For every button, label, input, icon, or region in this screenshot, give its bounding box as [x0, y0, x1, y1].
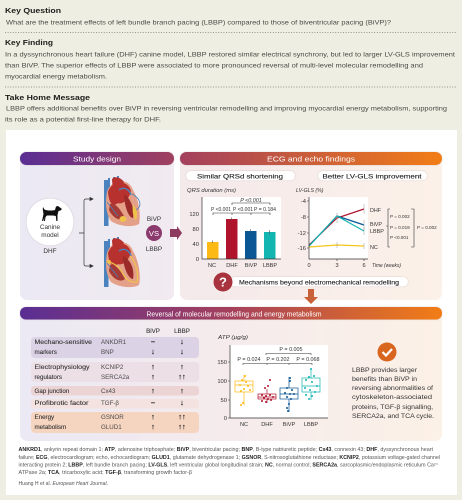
- line chart: LV-GLS: 3: [335, 263, 339, 269]
- reversal header: Reversal of molecular remodelling and energy metabolism: [146, 310, 322, 318]
- pill: similar QRSd: Similar QRSd shortening: [197, 173, 284, 180]
- mechanisms callout: [214, 272, 408, 292]
- box plot: ATP: 0: [224, 416, 227, 422]
- pill: similar QRSd: [186, 171, 295, 180]
- bracket arrows: [79, 198, 93, 268]
- box plot: ATP: P = 0.005: [279, 347, 303, 353]
- molecular table: markers: [34, 349, 57, 356]
- bar chart: QRS duration: P = 0.184: [254, 207, 276, 213]
- molecular table: regulators: [34, 374, 62, 381]
- bar chart: QRS duration: 0: [196, 257, 199, 263]
- line chart: LV-GLS: LV-GLS (%): [296, 188, 324, 194]
- line chart: LV-GLS: BiVP: [370, 222, 382, 228]
- molecular table: metabolism: [34, 424, 66, 431]
- BiVP vs LBBP badge: [146, 216, 162, 253]
- BiVP vs LBBP badge: BiVP: [147, 216, 161, 223]
- molecular table: –: [151, 337, 155, 346]
- molecular table: KCNIP2: [101, 364, 124, 371]
- take home message: [5, 93, 448, 124]
- molecular table: Cx43: [101, 388, 116, 395]
- line chart: LV-GLS: LBBP: [370, 229, 384, 235]
- line chart: LV-GLS: -16: [298, 246, 306, 252]
- line chart: LV-GLS: P = 0.019: [390, 225, 410, 230]
- panel: ECG and echo findings: [180, 152, 442, 300]
- footnote abbreviations: failure; ECG, electrocardiogram; echo, echocardiogram; GLUD1, glutamate dehydrogenase 1; GSNOR, S-nitrosoglutathione reductase; KCNIP2, potassium voltage-gated channel: [18, 455, 440, 461]
- citation: Huang H et al. European Heart Journal.: [18, 481, 108, 487]
- box plot: ATP: ATP (µg/g): [217, 335, 248, 341]
- box plot: ATP: 100: [217, 379, 227, 385]
- molecular table: ↑: [151, 362, 155, 371]
- footnote abbreviations: ATPase 2a; TCA, tricarboxylic acid; TGF-β, transforming growth factor-β: [18, 470, 192, 476]
- bar chart: QRS duration: NC: [208, 263, 216, 269]
- conclusion text: reversing abnormalities of: [352, 385, 433, 392]
- molecular table: ↑: [151, 412, 155, 421]
- molecular table: –: [151, 398, 155, 407]
- molecular table: [31, 328, 199, 433]
- bar chart: QRS duration: P <0.001: [233, 207, 253, 213]
- molecular table: GSNOR: [101, 414, 124, 421]
- key finding: Key Finding: [5, 38, 53, 47]
- bar chart: QRS duration: DHF: [226, 263, 238, 269]
- take home message: LBBP offers additional benefits over BiVP in reversing ventricular remodelling and improving myocardial energy metabolism, supporting: [6, 106, 448, 112]
- bar chart: QRS duration: P <0.001: [211, 207, 231, 213]
- dog model circle: [26, 198, 74, 255]
- line chart: LV-GLS: [296, 188, 437, 269]
- line chart: LV-GLS: -8: [301, 215, 306, 221]
- box plot: ATP: NC: [240, 422, 248, 428]
- heart: BiVP: [104, 176, 140, 226]
- key question: Key Question: [5, 6, 61, 15]
- conclusion text: proteins, TGF-β signalling,: [352, 404, 433, 411]
- bar chart: QRS duration: BiVP: [245, 263, 257, 269]
- bar chart: QRS duration: LBBP: [263, 263, 277, 269]
- molecular table: SERCA2a: [101, 374, 130, 381]
- molecular table: ↑: [180, 386, 184, 395]
- key question: What are the treatment effects of left bundle branch pacing (LBBP) compared to those of biventricular pacing (BiVP)?: [6, 20, 392, 26]
- box plot: ATP: [217, 335, 328, 428]
- molecular table: ↑: [151, 372, 155, 381]
- line chart: LV-GLS: -4: [301, 199, 307, 205]
- molecular table: ↑: [151, 386, 155, 395]
- molecular table: ↓: [180, 398, 184, 407]
- key finding: than BiVP. The superior effects of LBBP were associated to more pronounced reversal of multi-level molecular remodelling and: [5, 62, 424, 70]
- bar chart: QRS duration: 120: [189, 212, 199, 218]
- line chart: LV-GLS: NC: [370, 245, 378, 251]
- molecular table: Energy: [34, 414, 55, 421]
- conclusion text: LBBP provides larger: [352, 367, 418, 374]
- conclusion text: [352, 367, 434, 420]
- line chart: LV-GLS: 6: [362, 263, 366, 269]
- mechanisms callout: Mechanisms beyond electromechanical remodelling: [239, 279, 399, 286]
- molecular table: LBBP: [174, 328, 190, 335]
- box plot: ATP: 50: [221, 398, 227, 404]
- box plot: ATP: P = 0.202: [266, 357, 290, 363]
- take home message: its role as a potential first-line therapy for DHF.: [5, 116, 161, 124]
- take home message: Take Home Message: [5, 93, 90, 102]
- BiVP vs LBBP badge: VS: [149, 229, 159, 238]
- molecular table: TGF-β: [101, 400, 119, 407]
- box plot: ATP: P = 0.024: [237, 357, 261, 363]
- key finding: In a dyssynchronous heart failure (DHF) canine model, LBBP restored similar electrical synchrony, but led to larger LV-GLS improvement: [5, 52, 455, 58]
- key finding: [5, 38, 455, 80]
- molecular table: ↑↑: [178, 422, 186, 431]
- bar chart: QRS duration: QRS duration (ms): [187, 188, 236, 194]
- molecular table: ↓: [180, 347, 184, 356]
- molecular table: Electrophysiology: [34, 364, 91, 371]
- molecular table: ↑↑: [178, 372, 186, 381]
- line chart: LV-GLS: DHF: [370, 208, 382, 214]
- bar chart: QRS duration: P <0.001: [240, 198, 262, 204]
- line chart: LV-GLS: P = 0.002: [417, 225, 437, 230]
- key finding: myocardial energy metabolism.: [5, 74, 107, 80]
- molecular table: BNP: [101, 349, 114, 356]
- line chart: LV-GLS: -12: [298, 231, 306, 237]
- molecular table: Mechano-sensitive: [34, 339, 93, 346]
- bar chart: QRS duration: 80: [193, 227, 199, 233]
- icon: check mark: [378, 342, 396, 362]
- conclusion text: SERCA2a, and TCA cycle.: [352, 413, 434, 420]
- BiVP vs LBBP badge: LBBP: [146, 246, 162, 253]
- molecular table: ↑↑: [178, 412, 186, 421]
- mechanisms callout: ?: [219, 274, 227, 290]
- line chart: LV-GLS: P <0.001: [390, 235, 409, 240]
- conclusion text: cytoskeleton-associated: [352, 394, 433, 401]
- study design header: Study design: [73, 154, 121, 164]
- box plot: ATP: DHF: [261, 422, 273, 428]
- pill: better LV-GLS: Better LV-GLS improvement: [322, 173, 422, 180]
- key question: [5, 6, 392, 26]
- molecular table: ↓: [151, 347, 155, 356]
- ECG header: ECG and echo findings: [267, 154, 355, 164]
- arrow: mechanisms down: [304, 289, 318, 304]
- dog model circle: DHF: [43, 248, 57, 255]
- conclusion text: benefits than BiVP in: [352, 376, 417, 383]
- molecular table: ↑: [151, 422, 155, 431]
- box plot: ATP: P = 0.068: [296, 357, 320, 363]
- line chart: LV-GLS: P = 0.002: [390, 214, 410, 219]
- footnote abbreviations: interacting protein 2; LBBP, left bundle branch pacing; LV-GLS, left ventricular global longitudinal strain; NC, normal control; SERCA2a , sarcoplasmic/endoplasmic reticulum Ca²⁺: [18, 462, 439, 468]
- molecular table: BiVP: [146, 328, 160, 335]
- panel: study design: [20, 152, 174, 300]
- panel: reversal of molecular remodelling: [20, 307, 442, 441]
- molecular table: ↓: [180, 337, 184, 346]
- molecular table: ANKDR1: [101, 339, 127, 346]
- molecular table: Profibrotic factor: [34, 400, 88, 407]
- box plot: ATP: 150: [217, 360, 227, 366]
- reversal header: [20, 307, 442, 320]
- pill: better LV-GLS: [318, 171, 427, 180]
- heart: LBBP: [104, 237, 140, 287]
- line chart: LV-GLS: 0: [307, 263, 311, 269]
- molecular table: GLUD1: [101, 424, 122, 431]
- dog model circle: model: [41, 232, 59, 239]
- footnote abbreviations: ANKRD1 , ankyrin repeat domain 1; ATP, adenosine triphosphate; BiVP, biventricular pacing; BNP, B-type natriuretic peptide; Cx43, connexin 43; DHF, dyssynchronous heart: [18, 447, 434, 453]
- line chart: LV-GLS: Time (weeks): [372, 263, 401, 269]
- bar chart: QRS duration: 40: [193, 242, 199, 248]
- molecular table: ↑: [180, 362, 184, 371]
- ECG header: [180, 152, 442, 165]
- molecular table: Gap junction: [34, 388, 70, 395]
- study design header: [20, 152, 174, 165]
- footnote abbreviations: [18, 447, 440, 476]
- box plot: ATP: BiVP: [283, 422, 295, 428]
- box plot: ATP: LBBP: [304, 422, 318, 428]
- bar chart: QRS duration: [187, 188, 281, 269]
- dog model circle: Canine: [40, 224, 61, 231]
- arrow: study design to findings: [170, 226, 182, 240]
- white figure card: [6, 130, 457, 495]
